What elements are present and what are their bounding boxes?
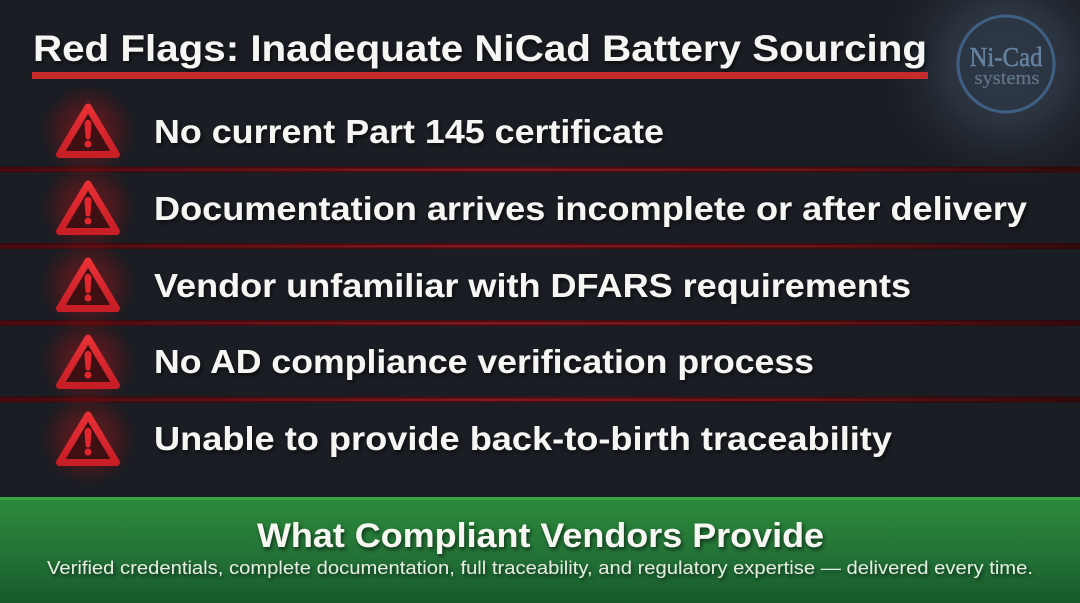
- icon: warning triangle 5: [40, 392, 136, 486]
- red flag 1: No current Part 145 certificate: [154, 113, 664, 150]
- red flag 2: [40, 161, 1028, 255]
- logo: Ni-Cad systems: systems: [974, 68, 1040, 89]
- logo: Ni-Cad systems: Ni-Cad: [970, 42, 1043, 72]
- logo: Ni-Cad systems: [958, 16, 1054, 112]
- icon: warning triangle 1: [40, 84, 136, 178]
- banner description: Verified credentials, complete documentation, full traceability, and regulatory expertise — delivered every time.: [47, 557, 1033, 578]
- red flag 3: [40, 238, 911, 332]
- title: Red Flags: Inadequate NiCad Battery Sourcing: [33, 28, 927, 69]
- icon: warning triangle 2: [40, 161, 136, 255]
- icon: warning triangle 3: [40, 238, 136, 332]
- banner heading: What Compliant Vendors Provide: [257, 517, 824, 555]
- red flag 3: Vendor unfamiliar with DFARS requirements: [154, 267, 911, 304]
- red flag 4: No AD compliance verification process: [154, 343, 814, 380]
- icon: warning triangle 4: [40, 315, 136, 409]
- panel: compliant vendors banner: [0, 497, 1080, 603]
- red flag 1: [40, 84, 664, 178]
- red flag 2: Documentation arrives incomplete or after delivery: [154, 190, 1028, 227]
- title underline: [32, 72, 928, 79]
- red flag 4: [40, 315, 814, 409]
- red flag 5: Unable to provide back-to-birth traceability: [154, 420, 893, 457]
- row dividers: [0, 166, 1080, 402]
- red flag 5: [40, 392, 893, 486]
